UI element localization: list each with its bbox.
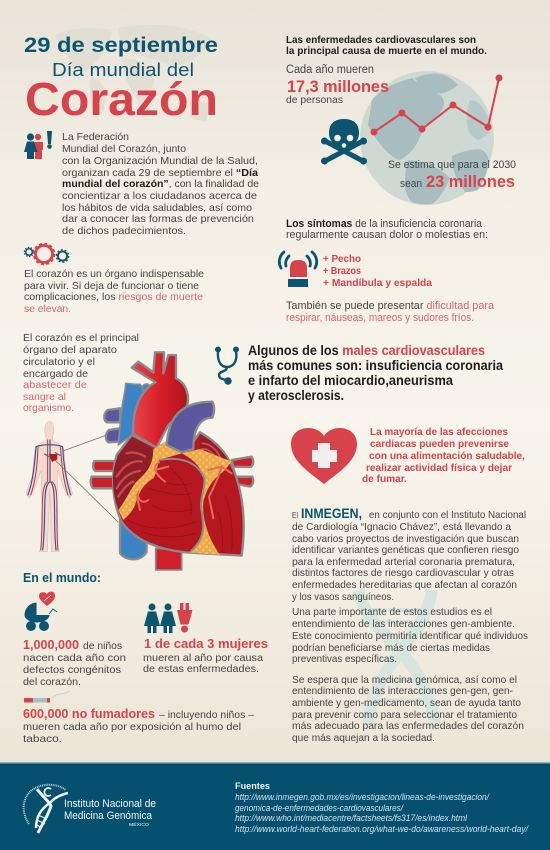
text: main cause of death: [286, 35, 487, 57]
superior vena cava: [118, 383, 145, 445]
text: heart is the main organ: sangre al: [23, 392, 66, 403]
illustration: anatomical heart: [91, 352, 253, 570]
text: heart is the main organ: [23, 333, 139, 414]
left atrium muscle: [113, 438, 154, 507]
icon: three women: [144, 603, 192, 633]
world map watermark: [55, 25, 212, 122]
stat: one in three women: 1 de cada 3 mujeres: [144, 636, 268, 651]
heading: en el mundo: En el mundo:: [23, 570, 101, 585]
stat: non smokers: 600,000 no fumadores: [23, 706, 155, 721]
text: gene-environment: podrían beneficiarse más de ciertas medidas: [292, 643, 490, 654]
DNA watermark: [358, 590, 435, 725]
logo: INMEGEN: MÉXICO: [129, 821, 150, 827]
list: symptom locations: [323, 254, 432, 289]
text: federation intro: los hábitos de vida saludables, así como: [62, 203, 252, 214]
text: federation intro: con la Organización Mundial de la Salud,: [62, 156, 258, 167]
text: genomic medicine: para prevenir como para seleccionar el tratamiento: [292, 710, 517, 721]
sources: http://www.world-heart-federation.org/what-we-do/awareness/world-heart-day/: [235, 824, 530, 834]
icon: people with exclamation mark: [24, 131, 52, 159]
woman two: [160, 604, 176, 633]
ventricle outline: [159, 459, 204, 551]
callout: prevention: realizar actividad física y dejar: [366, 463, 512, 474]
text: INMEGEN research: identificar variantes genéticas que confieren riesgo: [292, 545, 519, 556]
callout: prevention: cardiacas pueden prevenirse: [370, 439, 509, 450]
illustration: human circulatory system: [26, 422, 73, 552]
stat: 23 millones: sean: [400, 178, 422, 190]
text: gene-environment: [292, 607, 528, 665]
stat: one in three women: mueren al año por causa: [143, 653, 263, 664]
text: INMEGEN research: distintos factores de riesgo cardiovascular y otras: [292, 568, 514, 579]
text: federation intro: dar a conocer las formas de prevención: [62, 214, 254, 225]
stat: non smokers: – incluyendo niños –: [159, 710, 254, 721]
icon: heart with cross: [291, 428, 357, 484]
text: INMEGEN research: en conjunto con el Instituto Nacional: [369, 510, 526, 521]
callout: prevention: La mayoría de las afecciones: [370, 427, 508, 438]
text: symptoms: Los síntomas de la insuficiencia coronaria: [286, 218, 482, 230]
title main word: Corazón: [25, 73, 218, 125]
text: other symptoms: respirar, náuseas, mareos y sudores fríos.: [286, 312, 474, 324]
left side arteries: [91, 461, 115, 488]
stat: children with congenital defects: del corazón.: [23, 677, 81, 688]
text: heart indispensable: complicaciones, los riesgos de muerte: [24, 292, 203, 303]
text: symptoms: regularmente causan dolor o molestias en:: [286, 229, 488, 241]
text: federation intro: de dichos padecimientos.: [62, 226, 186, 237]
text: main cause of death: Las enfermedades cardiovasculares son: [286, 35, 476, 46]
icon: cigarette: [24, 691, 70, 702]
text: federation intro: organizan cada 29 de septiembre el “Día: [62, 168, 258, 179]
stat: non smokers: mueren cada año por exposición al humo del: [23, 722, 241, 733]
text: INMEGEN research: enfermedades hereditarias que afectan al corazón: [292, 580, 517, 591]
heading: cardiovascular illnesses: [248, 343, 503, 403]
text: INMEGEN research: [292, 506, 526, 603]
title: [24, 33, 218, 125]
purple veins: [104, 408, 120, 442]
text: federation intro: Mundial del Corazón, junto: [62, 144, 186, 155]
text: gene-environment: entendimiento de las interacciones gen-ambiente.: [292, 619, 515, 630]
text: genomic medicine: ambiente y gen-medicamento, sean de ayuda tanto: [292, 698, 521, 709]
left fat band: [118, 441, 182, 520]
text: heart indispensable: para vivir. Si deja de funcionar o tiene: [24, 281, 199, 292]
stat: 17,3 millones: Cada año mueren: [286, 64, 374, 76]
title subtitle: Día mundial del: [52, 59, 194, 80]
vena cava lower: [120, 518, 147, 559]
heading: cardiovascular illnesses: e infarto del miocardio,aneurisma: [248, 373, 453, 388]
text: INMEGEN research: El: [292, 510, 298, 520]
purple pulmonary artery: [167, 402, 214, 452]
stat: 23 millones: Se estima que para el 2030: [388, 159, 516, 171]
stat: 17,3 millones: [286, 64, 389, 106]
icon: alarm siren: [279, 252, 317, 287]
title date: 29 de septiembre: [24, 33, 218, 57]
stat: non smokers: [23, 706, 254, 745]
heading: cardiovascular illnesses: y aterosclerosis.: [248, 388, 344, 403]
stat: 17,3 millones: 17,3 millones: [287, 77, 389, 96]
text: genomic medicine: más adecuado para las enfermedades del corazón: [292, 721, 524, 732]
text: genomic medicine: Se espera que la medicina genómica, así como el: [292, 675, 517, 686]
text: federation intro: mundial del corazón”, con la finalidad de: [62, 179, 259, 190]
text: federation intro: concientizar a los ciudadanos acerca de: [62, 191, 257, 202]
logo name: Instituto Nacional de: [64, 798, 156, 810]
sources: genomica-de-enfermedades-cardiovasculares/: [235, 803, 404, 813]
connector lines: body to heart: [55, 432, 118, 522]
stat: children with congenital defects: nacen cada año con: [23, 653, 126, 664]
stat: children with congenital defects: defectos congénitos: [23, 665, 121, 676]
text: main cause of death: la principal causa de muerte en el mundo.: [286, 46, 487, 57]
heading: cardiovascular illnesses: más comunes son: insuficiencia coronaria: [248, 358, 503, 373]
upper right atrium: [200, 434, 229, 462]
list: symptom locations: + Pecho: [323, 254, 361, 265]
text: federation intro: La Federación: [62, 132, 129, 143]
line chart: rising deaths: [370, 74, 502, 136]
atrium fibres: [117, 453, 145, 497]
stat: 17,3 millones: de personas: [286, 94, 343, 106]
text: federation intro: [62, 132, 259, 237]
sources: http://www.inmegen.gob.mx/es/investigacion/lineas-de-investigacion/: [235, 792, 490, 802]
text: symptoms: [286, 218, 488, 241]
text: heart is the main organ: circulatorio y el: [23, 357, 95, 368]
stat: 23 millones: 23 millones: [426, 172, 515, 191]
text: INMEGEN research: para la enfermedad arterial coronaria prematura,: [292, 557, 515, 568]
stat: one in three women: de estas enfermedades.: [143, 664, 259, 675]
stat: children with congenital defects: de niños: [83, 641, 122, 652]
descending aorta: [156, 548, 182, 570]
text: genomic medicine: que más aquejan a la sociedad.: [292, 733, 435, 744]
footer band: [0, 762, 550, 850]
text: INMEGEN research: INMEGEN,: [301, 506, 362, 521]
text: other symptoms: [286, 300, 494, 324]
text: genomic medicine: entendimiento de las interacciones gen-gen, gen-: [292, 686, 513, 697]
text: heart indispensable: se elevan.: [24, 304, 71, 315]
right fat band: [182, 449, 232, 555]
heart body silhouette: [113, 432, 244, 556]
text: other symptoms: También se puede presentar dificultad para: [286, 300, 494, 312]
text: genomic medicine: [292, 675, 524, 744]
icon: stethoscope: [216, 348, 238, 384]
sources: http://www.who.int/mediacentre/factsheets/fs317/es/index.html: [235, 813, 468, 823]
text: gene-environment: preventivas específicas.: [292, 654, 397, 665]
coronary branches: [137, 462, 232, 518]
logo emblem: [24, 785, 68, 833]
woman three inverted: [177, 603, 192, 632]
stat: non smokers: tabaco.: [23, 734, 62, 745]
text: heart is the main organ: El corazón es el principal: [23, 333, 139, 344]
logo: INMEGEN: Medicina Genómica: [64, 810, 153, 822]
callout: prevention: de fumar.: [362, 474, 407, 485]
icon: gears: [24, 244, 69, 264]
logo: INMEGEN: [24, 785, 156, 833]
sources: [235, 781, 530, 834]
stat: 23 millones: [388, 159, 516, 191]
text: INMEGEN research: y los vasos sanguíneos.: [292, 592, 394, 603]
heading: cardiovascular illnesses: Algunos de los males cardiovasculares: [248, 343, 485, 358]
text: INMEGEN research: de Cardiología “Ignacio Chávez”, está llevando a: [292, 522, 511, 533]
text: heart indispensable: El corazón es un órgano indispensable: [24, 269, 204, 280]
sources: Fuentes: [235, 781, 270, 792]
stat: one in three women: [143, 636, 268, 675]
text: heart is the main organ: encargado de: [23, 369, 88, 380]
right side arteries: [232, 457, 253, 487]
text: heart is the main organ: abastecer de: [23, 380, 87, 391]
aorta: [132, 352, 188, 448]
globe: [360, 71, 494, 205]
callout: prevention: con una alimentación saludable,: [369, 451, 525, 462]
woman one: [144, 604, 160, 633]
text: gene-environment: Una parte importante de estos estudios es el: [292, 607, 492, 618]
text: heart indispensable: [24, 269, 204, 315]
list: symptom locations: + Mandíbula y espalda: [323, 278, 432, 289]
icon: skull and crossbones: [321, 119, 367, 164]
icon: baby carriage with heart: [24, 592, 57, 631]
ventricle fibres: [128, 465, 232, 552]
text: heart is the main organ: organismo.: [23, 403, 74, 414]
stat: children with congenital defects: 1,000,000: [23, 638, 79, 652]
text: gene-environment: Este conocimiento permitiría identificar qué individuos: [292, 631, 528, 642]
text: INMEGEN research: cabo varios proyectos de investigación que buscan: [292, 534, 519, 545]
stat: children with congenital defects: [23, 638, 126, 688]
text: heart is the main organ: órgano del aparato: [23, 345, 117, 356]
callout: prevention: [362, 427, 525, 485]
list: symptom locations: + Brazos: [323, 266, 361, 277]
